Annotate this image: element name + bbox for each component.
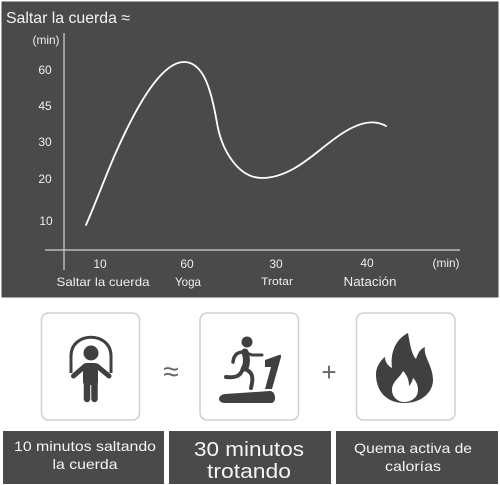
y axis labels: 30	[38, 135, 52, 149]
caption: jogging: 30 minutos	[194, 439, 304, 461]
icon: figure	[74, 346, 109, 399]
x axis values: 30	[269, 257, 283, 271]
caption: jogging	[169, 431, 331, 484]
x axis categories: Yoga	[175, 275, 201, 289]
caption: jogging: trotando	[207, 461, 291, 483]
x axis values: 10	[93, 257, 107, 271]
caption: jump rope: la cuerda	[52, 456, 118, 472]
y axis labels: (min)	[32, 33, 60, 47]
x axis categories: Saltar la cuerda	[56, 275, 150, 289]
caption: jump rope: 10 minutos saltando	[14, 438, 156, 454]
panel: chart	[2, 2, 498, 298]
icon: treadmill	[219, 355, 281, 403]
icon: rope	[71, 337, 111, 373]
y axis	[63, 33, 65, 270]
y axis labels: 20	[38, 172, 52, 186]
x axis values: 60	[180, 257, 194, 271]
x axis categories: Natación	[344, 274, 396, 289]
y axis labels: 10	[39, 214, 53, 228]
x axis	[45, 249, 460, 251]
icon card: treadmill	[200, 313, 298, 420]
caption: jump rope	[3, 431, 164, 484]
icon card: jump rope	[42, 313, 140, 420]
caption: calories: calorías	[385, 458, 441, 474]
x axis values: 40	[360, 256, 374, 270]
icon: runner	[226, 336, 262, 388]
line curve	[86, 62, 386, 225]
icon card: flame	[356, 313, 455, 420]
icon: flame	[376, 333, 433, 403]
y axis labels: 45	[38, 99, 52, 113]
heading: Saltar la cuerda ≈	[6, 10, 130, 27]
caption: calories: Quema activa de	[354, 440, 472, 456]
y axis labels: 60	[38, 63, 52, 77]
symbol: approximately equal: ≈	[163, 356, 179, 387]
x axis categories: Trotar	[261, 276, 293, 288]
x axis values: (min)	[432, 256, 460, 270]
x axis categories	[56, 274, 396, 289]
y axis labels	[32, 33, 60, 228]
symbol: plus: +	[321, 357, 337, 387]
caption: calories	[336, 431, 498, 484]
x axis values	[93, 256, 460, 271]
